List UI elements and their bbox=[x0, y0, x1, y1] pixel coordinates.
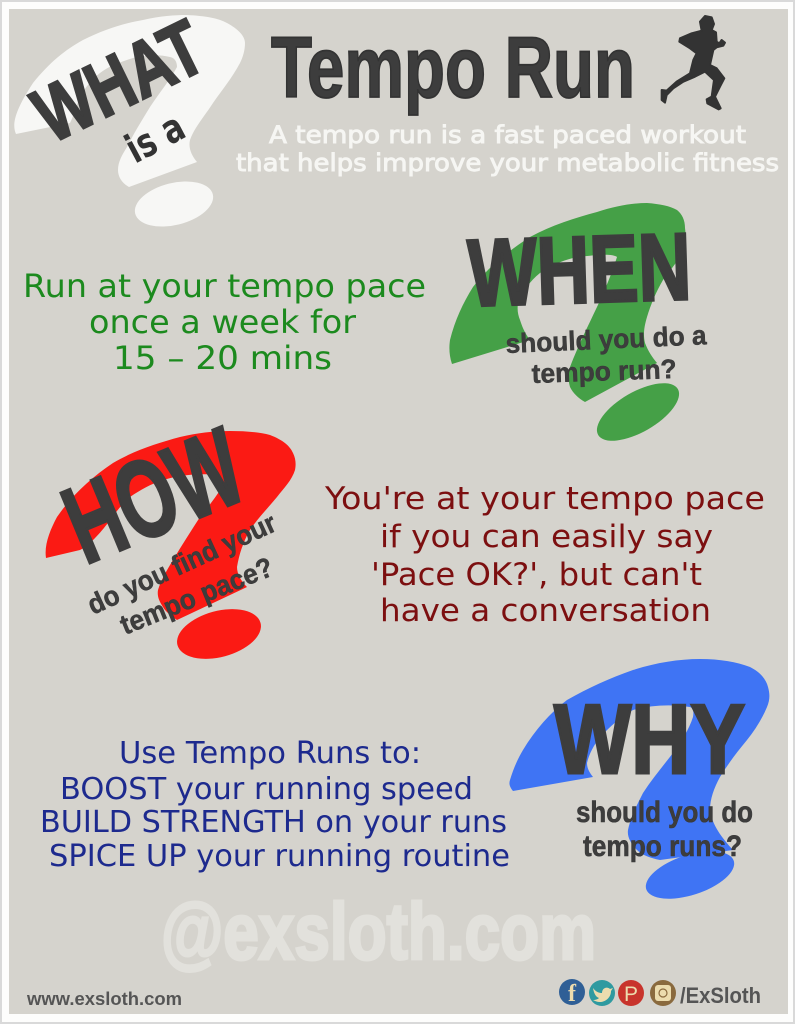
text block: how answer: 'Pace OK?', but can't bbox=[371, 557, 702, 593]
subheading: should you do a tempo run bbox=[505, 320, 708, 389]
subheading: do you find your tempo pace: tempo pace? bbox=[116, 551, 277, 641]
subtitle text: A tempo run is a fast paced workout bbox=[269, 121, 746, 149]
subtitle text: that helps improve your metabolic fitness bbox=[236, 149, 779, 177]
panel: when bbox=[449, 203, 708, 452]
icon: facebook: f bbox=[568, 981, 577, 1007]
text block: how answer: if you can easily say bbox=[380, 519, 713, 555]
text block: why answer: BUILD STRENGTH on your runs bbox=[40, 805, 507, 840]
text block: how answer bbox=[324, 481, 765, 629]
question mark: green bbox=[449, 203, 688, 452]
subheading: should you do tempo runs bbox=[576, 796, 753, 863]
social handle: /ExSloth bbox=[680, 983, 761, 1008]
question mark: red bbox=[46, 431, 296, 667]
icon: twitter bbox=[589, 980, 615, 1006]
website url: www.exsloth.com bbox=[26, 989, 182, 1009]
heading: WHEN: WHEN bbox=[466, 214, 693, 327]
text block: why answer bbox=[40, 736, 510, 874]
panel: why bbox=[509, 659, 769, 908]
text block: when answer bbox=[23, 267, 426, 377]
heading: WHY: WHY bbox=[554, 684, 745, 794]
text block: why answer: BOOST your running speed bbox=[60, 772, 473, 807]
title: Tempo Run bbox=[271, 20, 635, 116]
subheading: should you do tempo runs: should you do bbox=[576, 796, 753, 829]
subtitle text bbox=[236, 121, 779, 177]
text block: how answer: have a conversation bbox=[380, 593, 711, 629]
text block: how answer: You're at your tempo pace bbox=[324, 481, 765, 517]
question mark: white bbox=[14, 15, 245, 234]
subheading: is a: is a bbox=[118, 104, 193, 173]
panel: what bbox=[14, 3, 245, 234]
social icons bbox=[559, 979, 676, 1007]
icon: instagram bbox=[650, 980, 676, 1006]
subheading: do you find your tempo pace: do you find your bbox=[83, 507, 281, 620]
text block: why answer: Use Tempo Runs to: bbox=[119, 736, 421, 771]
text block: when answer: once a week for bbox=[89, 303, 357, 341]
subheading: should you do a tempo run: tempo run? bbox=[531, 354, 677, 389]
icon: pinterest: P bbox=[624, 983, 638, 1006]
heading: HOW: HOW bbox=[47, 405, 261, 587]
subheading: should you do a tempo run: should you do a bbox=[505, 320, 708, 359]
text block: when answer: Run at your tempo pace bbox=[23, 267, 426, 305]
subheading: should you do tempo runs: tempo runs? bbox=[583, 830, 742, 863]
text block: why answer: SPICE UP your running routine bbox=[49, 839, 510, 874]
question mark: blue bbox=[509, 659, 769, 908]
watermark: @exsloth.com bbox=[161, 887, 596, 976]
text block: when answer: 15 – 20 mins bbox=[113, 339, 332, 377]
icon: runner silhouette bbox=[662, 16, 725, 109]
panel: how bbox=[46, 405, 296, 667]
